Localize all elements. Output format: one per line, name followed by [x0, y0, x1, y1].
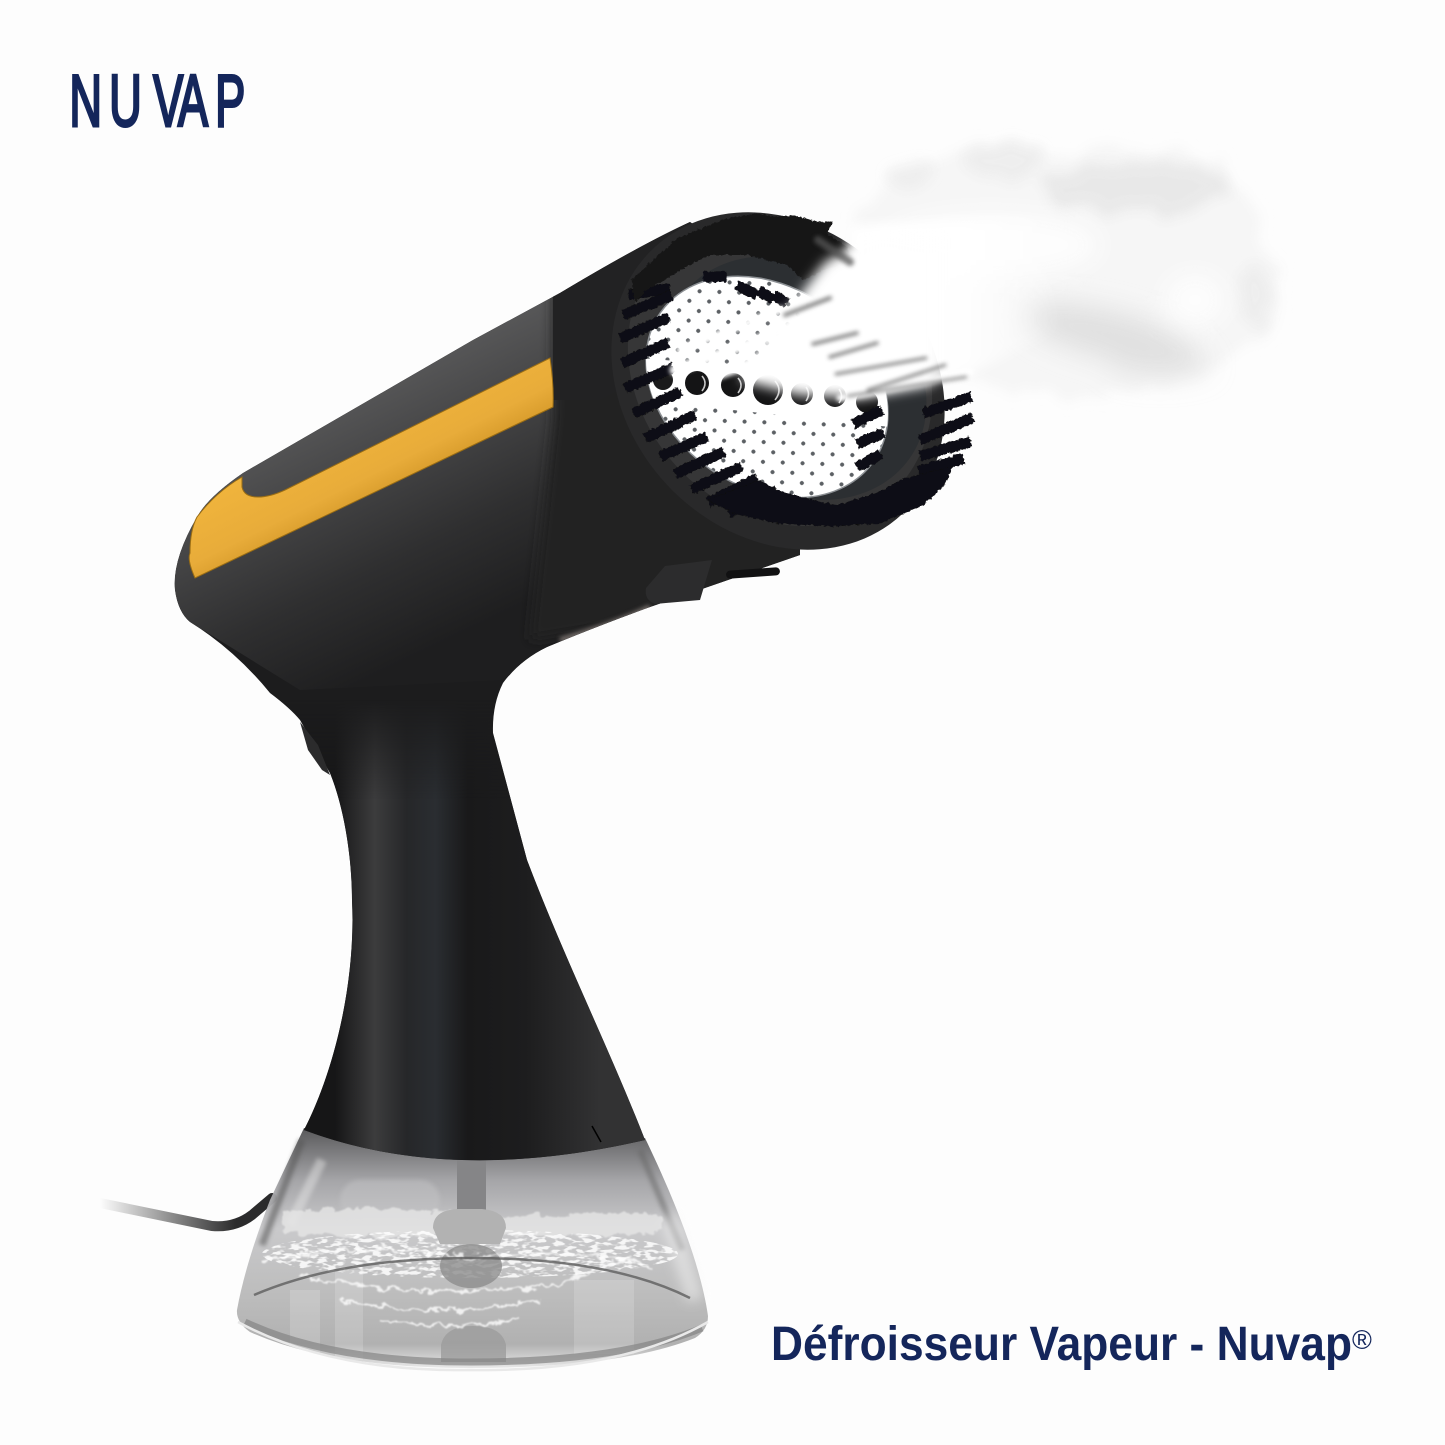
- inner wall: [565, 156, 995, 588]
- steamer body: [174, 222, 800, 1160]
- dark streaks inside jets: [785, 240, 966, 396]
- tank floor: [238, 1258, 708, 1370]
- steam nozzles: [653, 370, 878, 413]
- gold stripe: [189, 358, 553, 578]
- power cord: [100, 1198, 272, 1226]
- product name caption: ®: [1352, 1325, 1372, 1355]
- steamer head: [616, 212, 976, 604]
- steam jets: [675, 215, 1060, 398]
- product name caption: Défroisseur Vapeur - Nuvap: [771, 1318, 1352, 1371]
- rear trigger button: [300, 722, 330, 775]
- bristles: [620, 213, 973, 527]
- body shading: [174, 222, 800, 1160]
- translucent vertical bands on the floor: [290, 1270, 634, 1360]
- inner tube and float: [433, 1160, 506, 1362]
- water splashes: [262, 1250, 650, 1326]
- steam cloud: [835, 144, 1278, 397]
- inner cylinder: [616, 206, 974, 550]
- cloud shading: upper grey band: [888, 145, 1273, 327]
- foam speckle: [262, 1230, 678, 1278]
- cloud shading: lower grey band: [1017, 290, 1210, 380]
- underside notch: [646, 560, 712, 604]
- seam mark on collar: [592, 1126, 601, 1142]
- water surface: [280, 1209, 664, 1237]
- jet fade into cloud: [850, 215, 1060, 395]
- cloud highlight core: [880, 213, 1225, 326]
- logo: NUVAP wordmark: NUVAP: [69, 60, 245, 142]
- underside slot: [726, 567, 780, 579]
- water tank: [237, 1128, 708, 1370]
- outer rim: [543, 144, 1013, 618]
- perforated plate: [645, 276, 889, 498]
- tank side reflections: [262, 1140, 695, 1300]
